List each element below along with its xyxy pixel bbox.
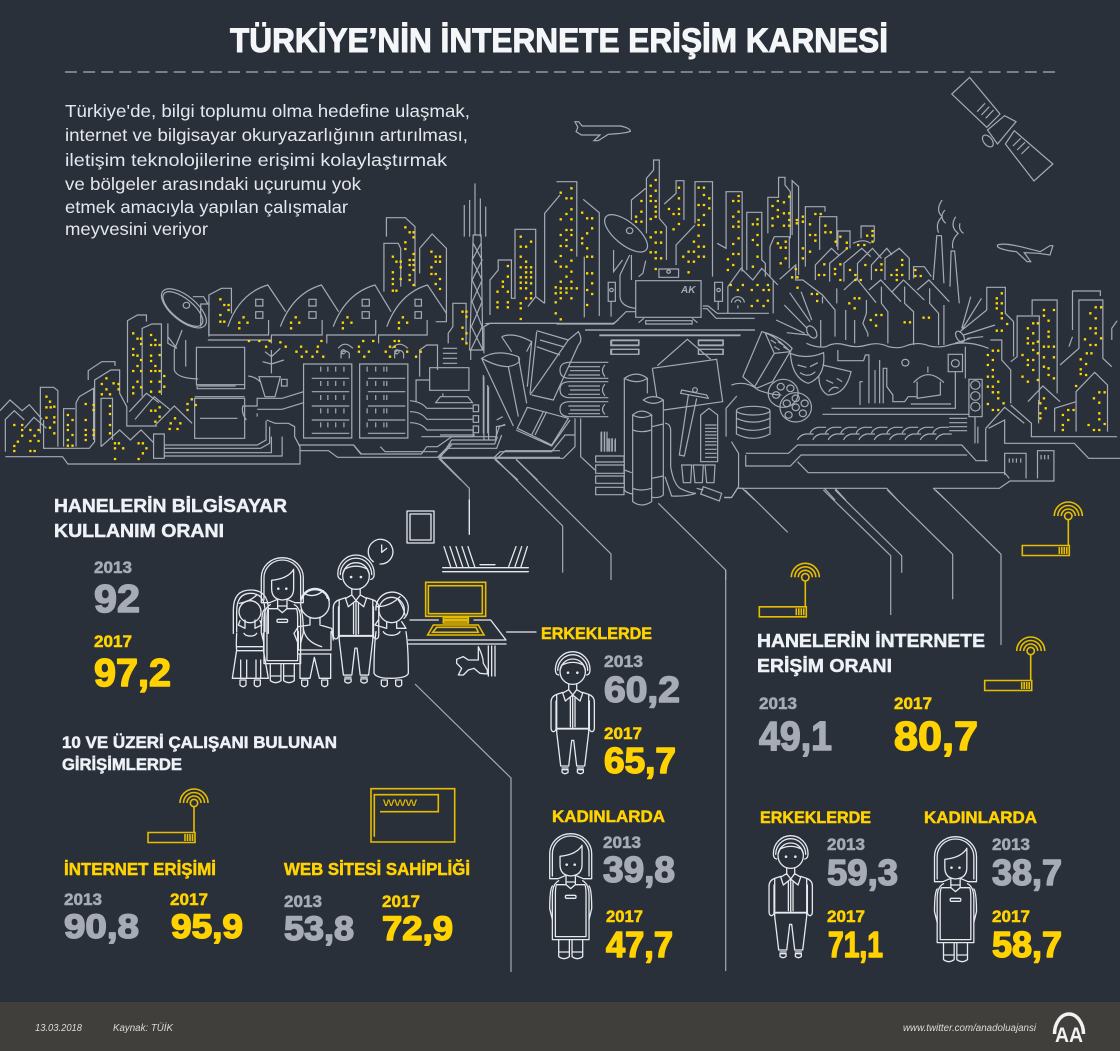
footer bar: 13.03.2018 (35, 1023, 82, 1034)
label: internet access: İNTERNET ERİŞİMİ (64, 859, 216, 879)
stats: website ownership: 2017 (382, 893, 420, 911)
icon: airplane right (997, 244, 1053, 262)
stats: internet women: 2017 (992, 908, 1030, 926)
icon: airplane left (575, 122, 630, 141)
stats: internet men: 59,3 (827, 852, 898, 893)
stats: internet access: 2017 (170, 891, 208, 909)
stats: internet women: 2013 (992, 836, 1030, 854)
intro text: iletişim teknolojilerine erişimi kolaylaştırmak (65, 150, 447, 170)
heading: household computer use: HANELERİN BİLGİSAYAR (54, 495, 287, 516)
label: internet men: ERKEKLERDE (760, 808, 871, 827)
stats: household computer use: 97,2 (94, 652, 171, 695)
stats: computer use women: 47,7 (606, 924, 673, 965)
stats: computer use men: 60,2 (604, 669, 680, 710)
heading: household internet (757, 630, 985, 676)
icon: satellite (952, 77, 1053, 181)
father (333, 555, 379, 683)
stats: household internet (759, 695, 978, 759)
stats: website ownership: 2013 (284, 893, 322, 911)
stats: household computer use: 92 (94, 578, 140, 621)
intro text: ve bölgeler arasındaki uçurumu yok (65, 174, 361, 194)
stats: household internet: 2017 (894, 695, 932, 713)
footer bar (0, 1002, 1120, 1051)
intro text: etmek amacıyla yapılan çalışmalar (65, 197, 348, 217)
label: internet women: KADINLARDA (924, 808, 1037, 827)
stats: internet men: 2013 (827, 836, 865, 854)
heading: household internet: HANELERİN İNTERNETE (757, 630, 985, 651)
intro text: meyvesini veriyor (65, 219, 208, 239)
stats: website ownership: 72,9 (382, 910, 453, 948)
stats: internet women (992, 836, 1062, 965)
stats: computer use women: 2017 (606, 908, 643, 926)
yellow computer (426, 582, 486, 635)
stats: computer use women (603, 834, 675, 965)
frame, clock, shelf and desk (368, 500, 536, 676)
illustration: family at computer (232, 500, 536, 687)
icon: website (371, 789, 455, 842)
stats: computer use men (604, 653, 680, 781)
stats: computer use women: 39,8 (603, 849, 675, 890)
stats: household internet: 80,7 (894, 713, 978, 759)
icon: router left of heading (759, 563, 819, 617)
stats: computer use women: 2013 (603, 834, 641, 852)
circuit lines to stats (415, 490, 1001, 972)
intro text (65, 101, 470, 239)
stats: internet access (64, 891, 243, 946)
icon: router top right (1022, 502, 1082, 556)
stats: household computer use: 2017 (94, 633, 132, 651)
icon: man (551, 652, 594, 774)
title: TÜRKİYE’NİN İNTERNETE ERİŞİM KARNESİ (230, 21, 888, 60)
heading: enterprises (62, 733, 337, 774)
stats: household computer use (94, 559, 171, 695)
mother (261, 558, 303, 683)
cityscape: left half (0, 183, 560, 480)
icon: man (769, 836, 812, 958)
intro text: internet ve bilgisayar okuryazarlığının artırılması, (65, 125, 468, 145)
stats: household internet: 49,1 (759, 713, 832, 759)
label: computer use men: ERKEKLERDE (541, 624, 652, 643)
heading: enterprises: GİRİŞİMLERDE (62, 756, 182, 774)
stats: internet men: 2017 (827, 908, 865, 926)
heading: household computer use: KULLANIM ORANI (54, 520, 224, 541)
logo: Anadolu Agency: AA (1055, 1024, 1083, 1047)
stats: household computer use: 2013 (94, 559, 132, 577)
tv logo: AK (680, 285, 696, 296)
label: website ownership: WEB SİTESİ SAHİPLİĞİ (284, 858, 470, 879)
stats: internet women: 58,7 (992, 924, 1062, 965)
footer bar: Kaynak: TÜİK (113, 1022, 174, 1034)
heading: household internet: ERİŞİM ORANI (757, 655, 892, 676)
icon: woman (550, 834, 592, 959)
label: computer use women: KADINLARDA (552, 807, 665, 826)
icon: router enterprises (148, 789, 208, 842)
icon: woman (935, 837, 976, 962)
icon: website: www (382, 795, 417, 809)
stats: computer use men: 65,7 (604, 740, 676, 781)
stats: internet women: 38,7 (992, 852, 1062, 893)
stats: internet access: 90,8 (64, 908, 139, 946)
cityscape: right half (556, 160, 1120, 500)
stats: internet men: 71,1 (828, 924, 883, 965)
intro text: Türkiye'de, bilgi toplumu olma hedefine ulaşmak, (65, 101, 470, 121)
stats: computer use men: 2013 (604, 653, 643, 671)
heading: household computer use (54, 495, 287, 541)
stats: website ownership: 53,8 (284, 910, 354, 948)
children (232, 588, 408, 687)
stats: internet access: 95,9 (171, 908, 243, 946)
stats: internet men (827, 836, 898, 965)
logo: Anadolu Agency (1054, 1014, 1084, 1047)
icon: router right of heading (985, 637, 1045, 690)
stats: household internet: 2013 (759, 695, 797, 713)
books and tools (440, 320, 755, 580)
heading: enterprises: 10 VE ÜZERİ ÇALIŞANI BULUNAN (62, 733, 337, 752)
footer bar: www.twitter.com/anadoluajansi (903, 1023, 1037, 1034)
stats: internet access: 2013 (64, 891, 102, 909)
stats: website ownership (284, 893, 453, 948)
stats: computer use men: 2017 (604, 725, 642, 743)
